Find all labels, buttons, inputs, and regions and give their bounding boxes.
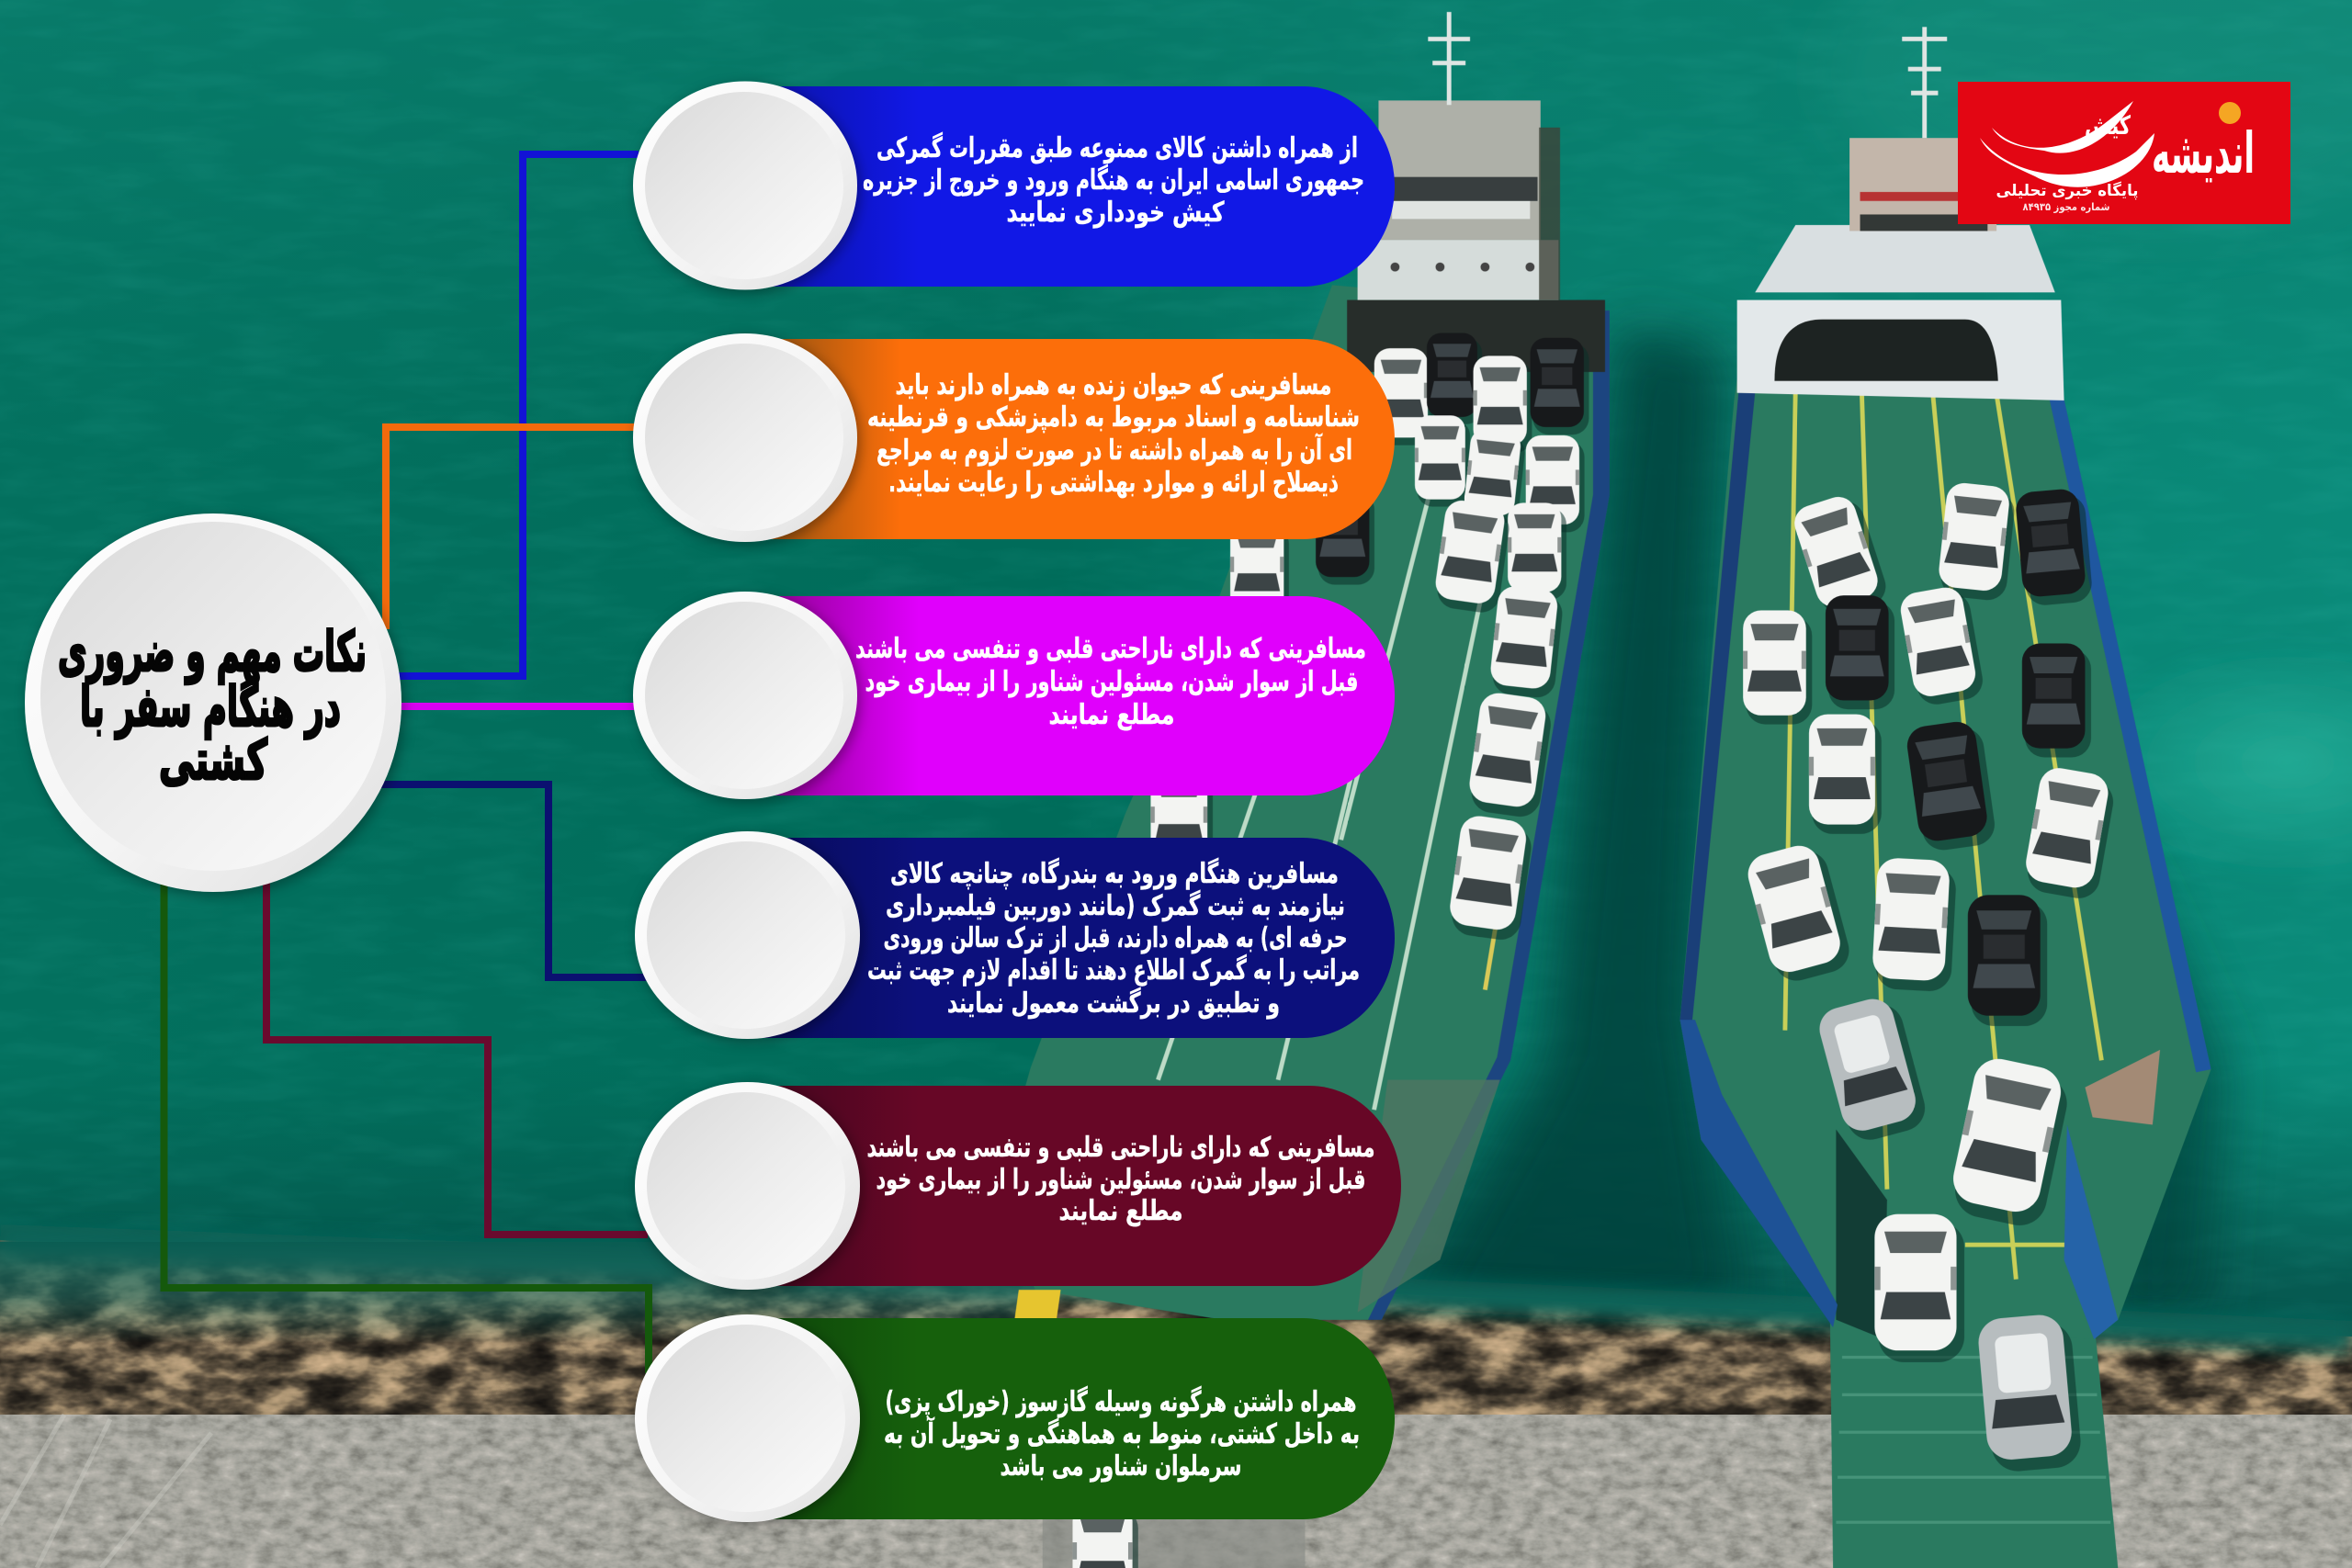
connector: orange <box>386 427 639 629</box>
text block: کیش خودداری نمایید <box>1007 197 1225 229</box>
text block: و تطبیق در برگشت معمول نمایند <box>947 987 1280 1020</box>
heading: کشتی <box>159 728 267 793</box>
logo <box>1958 82 2290 224</box>
text block <box>867 1132 1374 1227</box>
text block: قبل از سوار شدن، مسئولین شناور را از بیماری خود <box>865 666 1358 698</box>
text block: از همراه داشتن کالای ممنوعه طبق مقررات گمرکی <box>876 131 1358 164</box>
text block: حرفه ای) به همراه دارند، قبل از ترک سالن ورودی <box>884 922 1347 954</box>
text block: جمهوری اسامی ایران به هنگام ورود و خروج از جزیره <box>863 164 1364 197</box>
text block <box>867 857 1360 1020</box>
logo: license: شماره مجوز ۸۴۹۳۵ <box>2023 200 2109 214</box>
text block: همراه داشتن هرگونه وسیله گازسوز (خوراک پزی) <box>886 1385 1356 1418</box>
connector: green <box>164 882 649 1373</box>
connector lines <box>164 154 649 1373</box>
right ferry <box>1680 27 2211 1568</box>
text block: مسافرینی که دارای ناراحتی قلبی و تنفسی می باشند <box>855 633 1366 665</box>
panel: heart and respiratory conditions <box>633 592 1395 799</box>
text block: سرملوان شناور می باشد <box>1000 1450 1242 1483</box>
panel: heart and respiratory conditions repeat <box>635 1082 1401 1290</box>
text block: ذیصلاح ارائه و موارد بهداشتی را رعایت نمایند. <box>888 467 1339 499</box>
logo: orange dot <box>2219 102 2241 124</box>
heading: در هنگام سفر با <box>80 675 341 739</box>
logo: tagline: پایگاه خبری تحلیلی <box>1996 181 2139 200</box>
text block: به داخل کشتی، منوط به هماهنگی و تحویل آن به <box>884 1416 1360 1450</box>
connector: blue <box>395 154 639 676</box>
text block: مراتب را به گمرک اطلاع دهند تا اقدام لازم جهت ثبت <box>867 953 1360 987</box>
panel: live animals <box>633 333 1395 542</box>
text block <box>855 633 1366 731</box>
heading: نکات مهم و ضروری <box>58 620 367 684</box>
text block <box>867 369 1360 499</box>
panel: customs goods <box>633 81 1395 290</box>
text block <box>884 1385 1360 1483</box>
text block: قبل از سوار شدن، مسئولین شناور را از بیماری خود <box>876 1164 1365 1196</box>
connector: maroon <box>266 882 648 1235</box>
text block: نیازمند به ثبت گمرک (مانند دوربین فیلمبرداری <box>886 889 1345 922</box>
text block: مسافرینی که دارای ناراحتی قلبی و تنفسی می باشند <box>867 1132 1374 1164</box>
panel: central circle title <box>25 513 401 892</box>
logo: swoosh <box>1980 101 2154 187</box>
connector: magenta <box>395 703 639 710</box>
text block: شناسنامه و اسناد مربوط به دامپزشکی و قرنطینه <box>867 401 1360 434</box>
background photo: concrete quay <box>0 1415 2352 1568</box>
left ferry <box>998 12 1610 1568</box>
logo: wordmark small: کیش <box>2085 110 2132 141</box>
panel: gas appliances <box>635 1314 1395 1522</box>
text block: مسافرین هنگام ورود به بندرگاه، چنانچه کالای <box>890 857 1339 890</box>
panel: customs registration <box>635 831 1395 1039</box>
background photo: ship shadows <box>1378 321 2223 1350</box>
text block: مسافرینی که حیوان زنده به همراه دارند باید <box>895 369 1332 401</box>
background photo: rocky shore <box>0 1231 2352 1438</box>
text block: مطلع نمایند <box>1049 699 1174 731</box>
text block: ای آن را به همراه داشته تا در صورت لزوم به مراجع <box>876 433 1352 467</box>
text block <box>863 131 1364 229</box>
logo: wordmark: اندیشه <box>2152 119 2255 186</box>
heading <box>58 620 367 793</box>
connector: navy <box>381 784 648 977</box>
text block: مطلع نمایند <box>1058 1195 1183 1227</box>
